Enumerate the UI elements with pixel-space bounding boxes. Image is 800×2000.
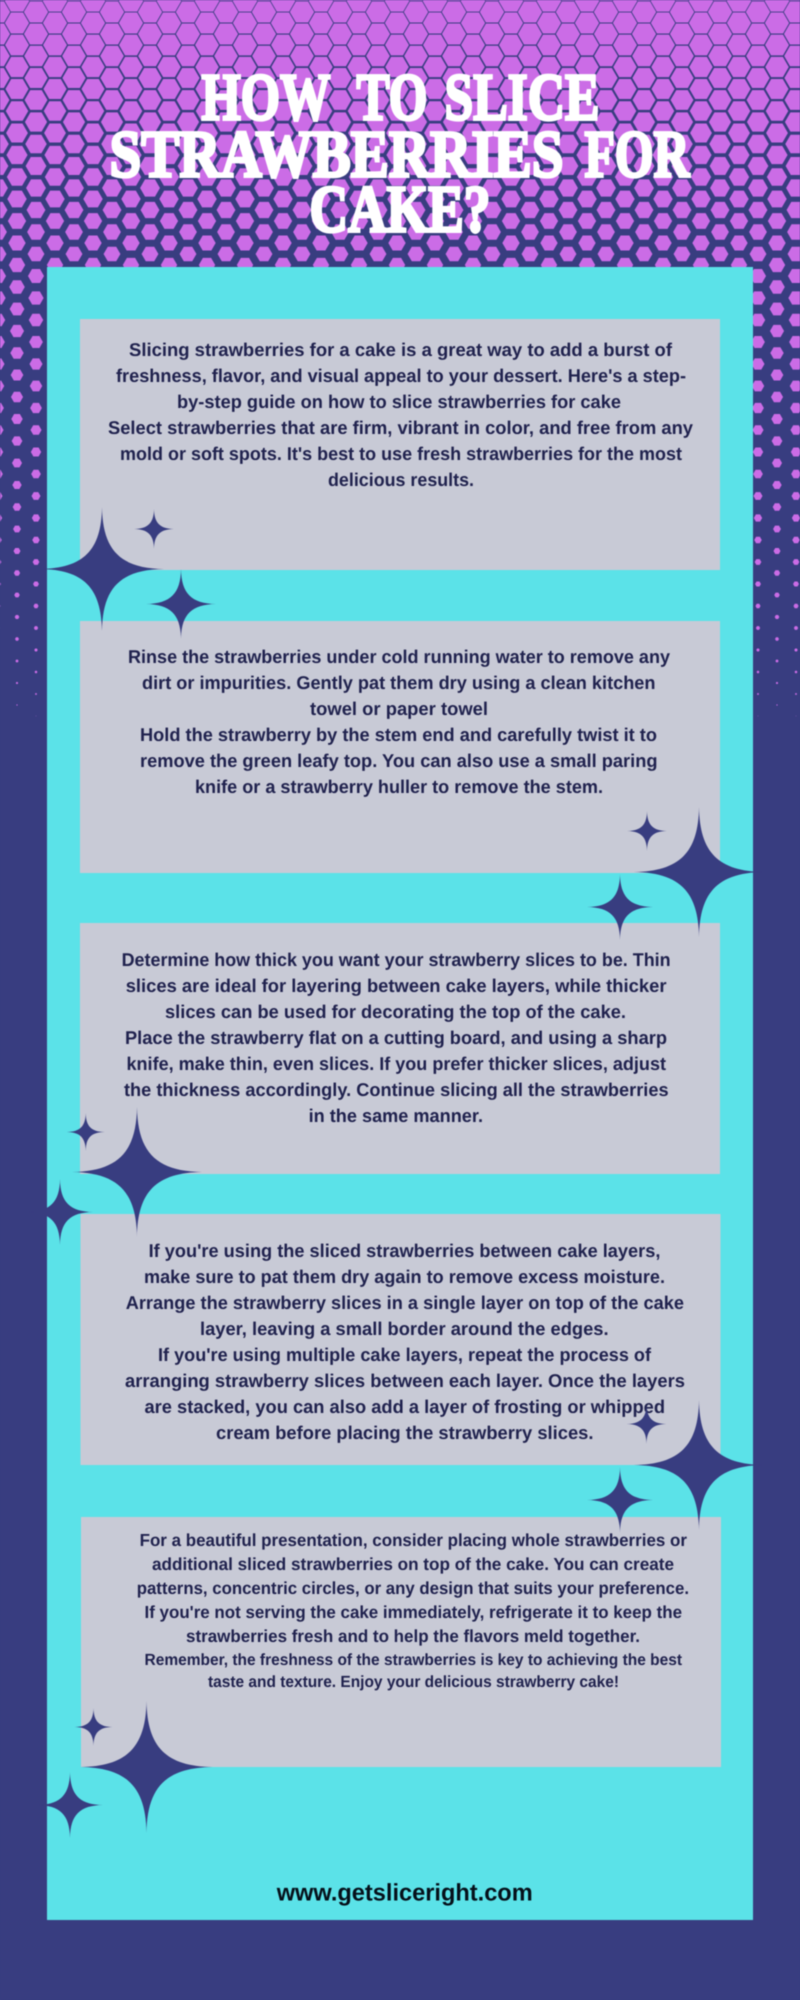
text block: thickness: slices are ideal for layering between cake layers, while thicker: [126, 975, 666, 996]
title: TO: [356, 60, 428, 134]
panel: rinse and hull: [80, 621, 720, 873]
text block: rinse: remove the green leafy top. You can also use a small paring: [140, 750, 658, 771]
panel: slice thickness: [80, 923, 720, 1174]
text block: layering: [125, 1240, 685, 1443]
text block: thickness: Determine how thick you want your strawberry slices to be. Thin: [122, 949, 671, 970]
text block: rinse: Hold the strawberry by the stem end and carefully twist it to: [140, 724, 657, 745]
panel background: [81, 1517, 721, 1767]
text block: presentation: strawberries fresh and to help the flavors meld together.: [186, 1626, 640, 1646]
text block: presentation: If you're not serving the cake immediately, refrigerate it to keep the: [144, 1602, 682, 1622]
panel: layering: [80, 1214, 720, 1465]
text block: thickness: in the same manner.: [309, 1105, 483, 1126]
panel background: [80, 923, 720, 1174]
text block: thickness: slices can be used for decorating the top of the cake.: [165, 1001, 626, 1022]
title: SLICE: [444, 60, 600, 134]
text block: thickness: knife, make thin, even slices. If you prefer thicker slices, adjust: [126, 1053, 666, 1074]
title: HOW: [202, 60, 330, 134]
text block: layering: Arrange the strawberry slices in a single layer on top of the cake: [126, 1292, 684, 1313]
text block: presentation: Remember, the freshness of the strawberries is key to achieving the best: [144, 1651, 683, 1669]
text block: layering: make sure to pat them dry again to remove excess moisture.: [144, 1266, 665, 1287]
text block: thickness: [122, 949, 671, 1126]
text block: layering: are stacked, you can also add a layer of frosting or whipped: [144, 1396, 665, 1417]
text block: presentation: For a beautiful presentation, consider placing whole strawberries or: [140, 1530, 687, 1550]
text block: intro: delicious results.: [328, 469, 474, 490]
sparkle group: lower right: [587, 1400, 764, 1533]
text block: layering: arranging strawberry slices between each layer. Once the layers: [125, 1370, 685, 1391]
sparkle group: middle left: [27, 1107, 202, 1245]
website url: www.getsliceright.com: [276, 1880, 533, 1906]
text block: thickness: the thickness accordingly. Continue slicing all the strawberries: [124, 1079, 669, 1100]
text block: layering: cream before placing the strawberry slices.: [216, 1422, 594, 1443]
text block: intro: by-step guide on how to slice strawberries for cake: [177, 391, 621, 412]
text block: rinse: Rinse the strawberries under cold running water to remove any: [128, 646, 671, 667]
text block: presentation: patterns, concentric circles, or any design that suits your preference.: [137, 1578, 689, 1598]
text block: intro: freshness, flavor, and visual appeal to your dessert. Here's a step-: [116, 365, 686, 386]
text block: presentation: additional sliced strawberries on top of the cake. You can create: [152, 1554, 674, 1574]
panel: presentation: [81, 1517, 721, 1767]
sparkle group: top left: [40, 507, 216, 639]
text block: intro: Select strawberries that are firm, vibrant in color, and free from any: [108, 417, 694, 438]
text block: rinse: [128, 646, 671, 797]
text block: presentation: taste and texture. Enjoy your delicious strawberry cake!: [208, 1673, 619, 1691]
text block: rinse: towel or paper towel: [310, 698, 488, 719]
panel background: [80, 621, 720, 873]
title: STRAWBERRIES: [110, 118, 564, 192]
panel: cyan content card: [47, 267, 753, 1920]
text block: layering: If you're using the sliced strawberries between cake layers,: [149, 1240, 660, 1261]
text block: intro: [108, 339, 694, 490]
text block: rinse: dirt or impurities. Gently pat them dry using a clean kitchen: [142, 672, 656, 693]
text block: rinse: knife or a strawberry huller to remove the stem.: [195, 776, 603, 797]
text block: layering: layer, leaving a small border around the edges.: [200, 1318, 609, 1339]
sparkle group: upper right: [587, 807, 764, 940]
text block: thickness: Place the strawberry flat on a cutting board, and using a sharp: [125, 1027, 667, 1048]
title: [110, 60, 690, 246]
sparkle group: bottom left: [37, 1701, 212, 1838]
hexagon halftone pattern: [0, 0, 800, 727]
panel background: [80, 319, 720, 570]
panel background: [80, 1214, 720, 1465]
panel: intro step: [80, 319, 720, 570]
title: FOR: [584, 118, 690, 192]
text block: layering: If you're using multiple cake layers, repeat the process of: [158, 1344, 652, 1365]
text block: intro: mold or soft spots. It's best to use fresh strawberries for the most: [120, 443, 682, 464]
text block: presentation: [137, 1530, 689, 1691]
title: CAKE?: [310, 172, 490, 246]
text block: intro: Slicing strawberries for a cake is a great way to add a burst of: [129, 339, 673, 360]
